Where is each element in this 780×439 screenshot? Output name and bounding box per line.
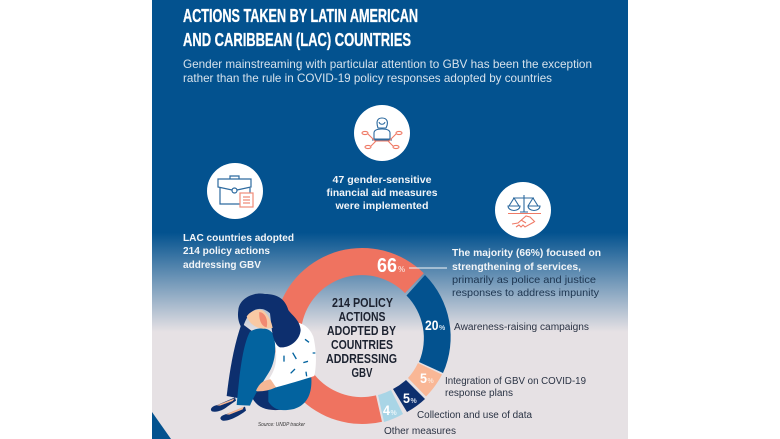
percentage labels: % bbox=[398, 265, 405, 274]
segment: 5% navy bbox=[393, 380, 425, 412]
segment labels: Other measures bbox=[384, 426, 456, 437]
subtitle bbox=[183, 57, 592, 85]
percentage labels: 4 bbox=[383, 402, 390, 418]
title: ACTIONS TAKEN BY LATIN AMERICAN bbox=[183, 6, 418, 26]
text: majority services: responses to address impunity bbox=[452, 287, 600, 299]
text: policy actions: 214 policy actions bbox=[183, 245, 270, 257]
donut centre text: 214 POLICY bbox=[332, 296, 394, 310]
corner triangle bbox=[152, 412, 171, 439]
percentage labels: 66 bbox=[377, 255, 397, 277]
icon: financial aid bbox=[354, 105, 410, 161]
percentage labels: 5 bbox=[420, 370, 427, 386]
donut centre text: COUNTRIES bbox=[331, 338, 393, 352]
percentage labels: 5 bbox=[403, 390, 410, 406]
segment labels: Awareness-raising campaigns bbox=[454, 322, 589, 333]
segment labels: Collection and use of data bbox=[417, 410, 532, 421]
text: financial aid: were implemented bbox=[334, 200, 428, 212]
subtitle: rather than the rule in COVID-19 policy responses adopted by countries bbox=[183, 71, 552, 85]
subtitle: Gender mainstreaming with particular attention to GBV has been the exception bbox=[183, 57, 592, 71]
donut centre text: ACTIONS bbox=[338, 310, 386, 324]
icon: briefcase bbox=[207, 163, 263, 219]
illustration: seated woman bbox=[211, 294, 316, 421]
segment labels: response plans bbox=[445, 388, 513, 399]
source note: Source: UNDP tracker bbox=[258, 422, 306, 428]
text: policy actions: addressing GBV bbox=[183, 259, 261, 271]
leader line bbox=[409, 267, 447, 269]
percentage labels: % bbox=[410, 398, 418, 405]
percentage labels: % bbox=[390, 410, 398, 417]
background panel bbox=[152, 0, 628, 439]
donut centre text bbox=[326, 296, 397, 380]
segment: 66% bbox=[274, 248, 424, 424]
donut chart bbox=[274, 248, 451, 424]
text: financial aid: 47 gender-sensitive bbox=[332, 174, 432, 186]
icon: scales and handshake bbox=[495, 182, 551, 238]
text: policy actions: LAC countries adopted bbox=[183, 232, 294, 244]
segment labels: Integration of GBV on COVID-19 bbox=[445, 376, 586, 387]
percentage labels: % bbox=[428, 378, 434, 385]
text: policy actions bbox=[183, 232, 294, 271]
text: majority services: primarily as police and justice bbox=[452, 274, 596, 286]
text: majority services: The majority (66%) focused on bbox=[452, 247, 601, 259]
percentage labels bbox=[377, 255, 446, 418]
percentage labels: 20 bbox=[425, 317, 439, 333]
donut centre text: GBV bbox=[352, 366, 373, 380]
text: majority services bbox=[452, 247, 601, 299]
donut centre text: ADDRESSING bbox=[326, 352, 397, 366]
text: financial aid: financial aid measures bbox=[326, 187, 438, 199]
text: financial aid bbox=[326, 174, 438, 212]
text: majority services: strengthening of services, bbox=[452, 261, 581, 273]
title: AND CARIBBEAN (LAC) COUNTRIES bbox=[183, 30, 411, 50]
donut centre text: ADOPTED BY bbox=[327, 324, 397, 338]
segment: 5% peach bbox=[408, 363, 442, 396]
percentage labels: % bbox=[439, 325, 446, 332]
segment labels bbox=[384, 322, 589, 437]
segment: 20% bbox=[406, 275, 451, 373]
segment: 4% bbox=[378, 390, 403, 422]
title bbox=[183, 6, 418, 50]
